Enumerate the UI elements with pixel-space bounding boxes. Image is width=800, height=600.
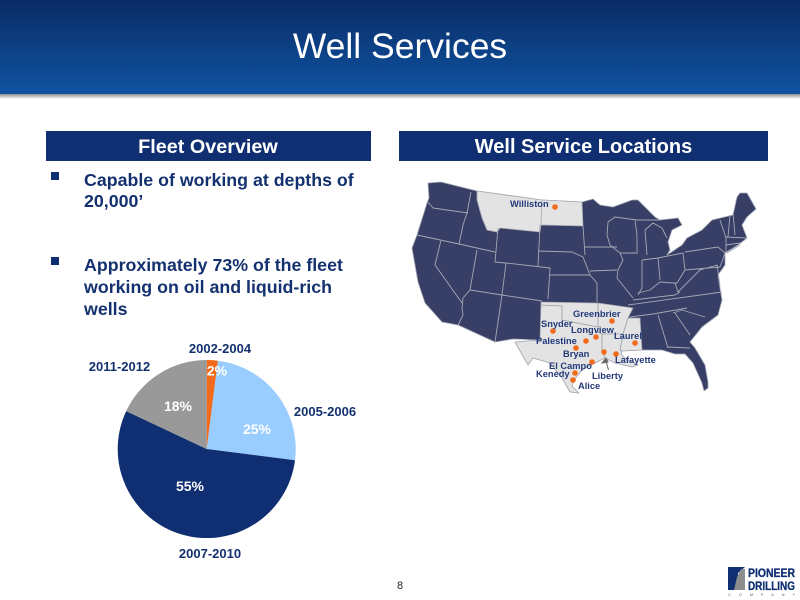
title: Well Services bbox=[293, 26, 507, 66]
state borders bbox=[417, 192, 747, 348]
value labels: 18% bbox=[164, 398, 193, 414]
location labels: Laurel bbox=[614, 331, 642, 341]
location labels bbox=[510, 199, 656, 391]
bullet: oil and liquid-rich share bbox=[51, 255, 343, 319]
heading: Fleet Overview bbox=[46, 131, 371, 161]
bullet: oil and liquid-rich share: working on oil and liquid-rich bbox=[83, 277, 332, 297]
location labels: Williston bbox=[510, 199, 549, 209]
bullet: oil and liquid-rich share: Approximately 73% of the fleet bbox=[84, 255, 343, 275]
value labels bbox=[164, 362, 272, 494]
highlighted states: Gulf region bbox=[515, 302, 642, 393]
slice: 2007-2010 bbox=[118, 411, 295, 538]
location labels: Kenedy bbox=[536, 369, 570, 379]
category labels bbox=[89, 341, 356, 561]
category labels: 2011-2012 bbox=[89, 359, 150, 374]
location labels: Liberty bbox=[592, 371, 624, 381]
map: US well service locations bbox=[412, 182, 756, 393]
location labels: El Campo bbox=[549, 361, 592, 371]
highlighted states: Montana and North Dakota bbox=[477, 191, 583, 232]
location labels: Snyder bbox=[541, 319, 573, 329]
header banner bbox=[0, 0, 800, 99]
heading: Fleet Overview: Fleet Overview bbox=[138, 136, 278, 158]
pointer arrow: Liberty bbox=[602, 358, 608, 370]
location labels: Palestine bbox=[536, 336, 577, 346]
bullet: depth capability bbox=[51, 170, 354, 211]
category labels: 2007-2010 bbox=[179, 546, 241, 561]
logo: Pioneer Drilling Company: PIONEER bbox=[748, 568, 796, 580]
bullet: oil and liquid-rich share: wells bbox=[83, 299, 128, 319]
slice: 2002-2004 bbox=[207, 360, 218, 449]
slice: 2005-2006 bbox=[207, 361, 296, 460]
page number: 8 bbox=[397, 580, 403, 592]
contiguous US landmass bbox=[412, 182, 756, 391]
location labels: Bryan bbox=[563, 349, 590, 359]
value labels: 25% bbox=[243, 421, 272, 437]
pie chart: fleet by build year bbox=[89, 341, 356, 561]
bullet: depth capability: Capable of working at depths of bbox=[84, 170, 354, 190]
location labels: Alice bbox=[578, 381, 600, 391]
location dots bbox=[550, 204, 638, 383]
category labels: 2005-2006 bbox=[294, 404, 356, 419]
slice: 2011-2012 bbox=[126, 360, 207, 449]
heading: Well Service Locations: Well Service Locations bbox=[475, 136, 692, 158]
bullet: depth capability: 20,000’ bbox=[84, 191, 143, 211]
value labels: 2% bbox=[207, 362, 228, 378]
location labels: Longview bbox=[571, 325, 615, 335]
location labels: Lafayette bbox=[615, 355, 656, 365]
heading: Well Service Locations bbox=[399, 131, 768, 161]
logo: Pioneer Drilling Company bbox=[728, 567, 796, 597]
location labels: Greenbrier bbox=[573, 309, 621, 319]
logo: Pioneer Drilling Company: COMPANY bbox=[728, 592, 795, 597]
value labels: 55% bbox=[176, 478, 205, 494]
category labels: 2002-2004 bbox=[189, 341, 252, 356]
